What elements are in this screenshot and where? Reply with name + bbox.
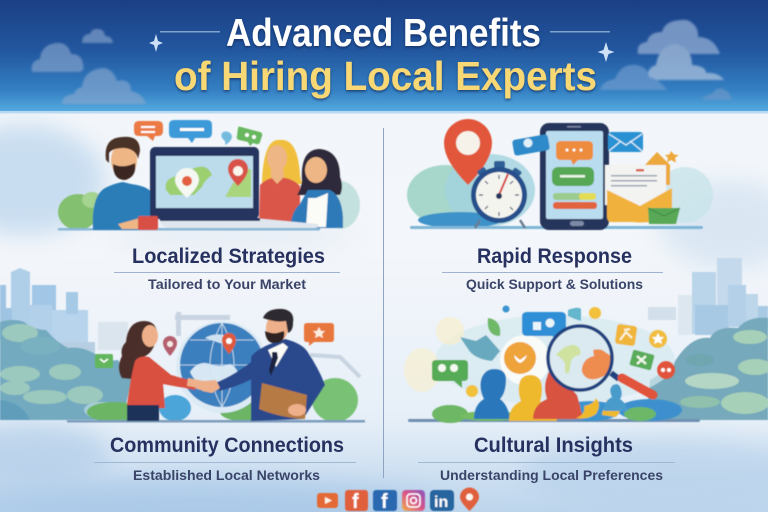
woman with dark hair	[290, 149, 343, 228]
floating icons	[502, 306, 675, 379]
illustration: team around laptop	[58, 120, 360, 230]
social icons row	[317, 488, 479, 512]
woman in red	[119, 321, 210, 421]
illustration: handshake and globe	[67, 309, 365, 422]
leaf and hand	[460, 318, 500, 361]
clouds right	[600, 20, 732, 100]
header banner	[0, 0, 768, 114]
sparkles	[149, 34, 614, 62]
map pins	[175, 159, 248, 198]
clouds left	[32, 29, 146, 104]
orange rating bubble	[304, 323, 334, 346]
icon: facebook orange	[345, 490, 368, 512]
woman with blonde hair	[259, 140, 302, 228]
location pin	[444, 119, 492, 185]
people silhouettes	[466, 369, 628, 421]
stopwatch	[471, 161, 527, 228]
like bubble	[522, 312, 566, 340]
subheading: Quick Support & Solutions	[466, 276, 643, 292]
icon: youtube	[317, 493, 338, 508]
heading: Cultural Insights	[474, 434, 633, 457]
icon: facebook blue	[373, 490, 397, 512]
man	[93, 137, 156, 230]
magnifying glass	[548, 326, 653, 395]
title line 2: of Hiring Local Experts	[174, 53, 597, 99]
heart badge	[504, 342, 536, 374]
icon: instagram	[402, 490, 425, 511]
green speech bubble	[432, 360, 468, 388]
foliage left	[0, 320, 132, 420]
city skyline left	[0, 268, 128, 360]
illustration: pin, stopwatch, phone, mail	[407, 119, 713, 230]
title rules	[160, 31, 610, 32]
heading: Localized Strategies	[132, 245, 325, 268]
city skyline right	[648, 258, 768, 335]
smartphone	[540, 123, 609, 230]
panel: cultural insights	[404, 306, 700, 483]
heading: Community Connections	[110, 434, 344, 457]
panel: community connections	[67, 309, 365, 483]
open envelope	[605, 151, 680, 224]
title line 1: Advanced Benefits	[226, 12, 541, 55]
panel: rapid response	[407, 119, 713, 292]
globe	[163, 321, 268, 413]
foliage right	[646, 318, 768, 420]
subheading: Established Local Networks	[133, 467, 320, 483]
green chat icon	[95, 354, 113, 368]
icon: location pin	[460, 488, 479, 511]
vertical divider	[383, 128, 384, 478]
laptop	[150, 147, 318, 228]
subheading: Tailored to Your Market	[148, 276, 306, 292]
speech bubbles	[134, 120, 262, 146]
illustration: people and magnifier	[404, 306, 700, 423]
panel: localized strategies	[58, 120, 360, 292]
heading: Rapid Response	[477, 245, 632, 268]
subheading: Understanding Local Preferences	[440, 467, 663, 483]
icon: linkedin	[430, 490, 454, 511]
chat tag	[512, 134, 550, 156]
coffee cup	[138, 216, 158, 230]
icon: linkedin: in	[434, 494, 448, 511]
blue envelope	[608, 132, 643, 152]
man in suit	[202, 309, 325, 421]
